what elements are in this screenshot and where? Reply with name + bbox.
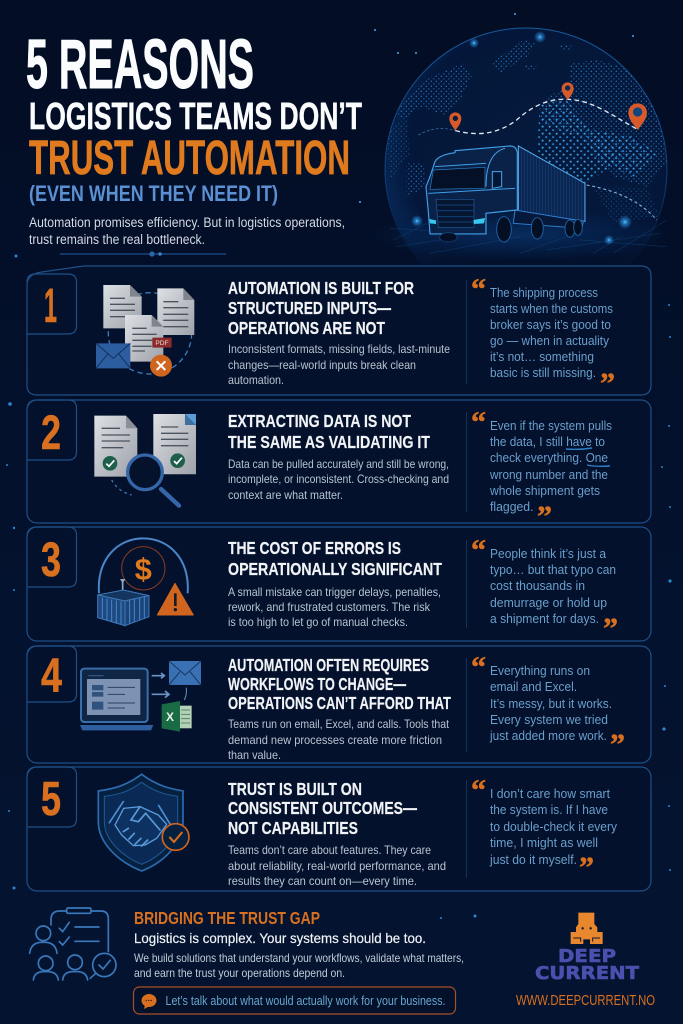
body text: about reliability, real-world performance, and — [228, 859, 446, 873]
quote: just do it myself. — [489, 853, 577, 867]
body text: incomplete, or inconsistent. Cross-checking and — [228, 472, 449, 486]
icon: shield with handshake — [98, 774, 189, 871]
quote: cost thousands in — [490, 579, 585, 593]
quote: wrong number and the — [489, 468, 608, 482]
body text — [228, 342, 450, 387]
number 3: 3 — [41, 534, 61, 587]
body text: and earn the trust your operations depend on. — [134, 966, 345, 980]
wordmark — [535, 946, 640, 984]
heading: OPERATIONALLY SIGNIFICANT — [228, 559, 442, 579]
heading: THE COST OF ERRORS IS — [228, 538, 401, 558]
icon: octopus — [571, 913, 603, 944]
quote: “ — [471, 406, 486, 439]
quote: go — when in actuality — [490, 334, 610, 348]
quote — [471, 534, 618, 645]
quote: flagged. — [490, 500, 534, 514]
quote: demurrage or hold up — [490, 596, 607, 610]
body text: We build solutions that understand your workflows, validate what matters, — [134, 951, 464, 965]
wordmark: CURRENT — [535, 963, 640, 984]
quote: typo… but that typo can — [490, 563, 616, 577]
heading — [228, 538, 442, 579]
intro text — [29, 215, 345, 247]
quote: basic is still missing. — [490, 366, 596, 380]
body text: changes—real-world inputs break clean — [228, 358, 416, 372]
quote — [471, 273, 615, 400]
quote: “ — [471, 651, 486, 684]
body text: results they can count on—every time. — [228, 874, 417, 888]
quote: ” — [537, 500, 552, 533]
panel: reason 1: 1 — [44, 280, 57, 333]
quote: it’s not… something — [490, 350, 594, 364]
body text: Teams don’t care about features. They care — [228, 843, 431, 857]
quote — [471, 774, 618, 884]
heading: NOT CAPABILITIES — [228, 818, 358, 838]
quote: “ — [471, 534, 486, 567]
quote: the data, I still have to — [490, 435, 605, 449]
title — [26, 25, 362, 185]
body text: Teams run on email, Excel, and calls. Tools that — [228, 717, 450, 731]
quote: whole shipment gets — [489, 484, 600, 498]
heading: CONSISTENT OUTCOMES— — [228, 798, 417, 818]
quote: Every system we tried — [490, 713, 608, 727]
quote: ” — [600, 367, 615, 400]
body text — [228, 717, 450, 762]
header divider — [60, 251, 226, 257]
body text: context are what matter. — [228, 488, 343, 502]
icon: container and cost warning: $ — [135, 552, 152, 586]
heading: OPERATIONS ARE NOT — [228, 318, 385, 338]
body text: A small mistake can trigger delays, penalties, — [228, 585, 441, 599]
heading: BRIDGING THE TRUST GAP — [134, 908, 320, 928]
icon: scattered documents — [96, 285, 194, 377]
hero illustration: globe and truck — [359, 13, 668, 262]
icon: container and cost warning — [98, 538, 193, 626]
body text: demand new processes create more friction — [228, 733, 442, 747]
quote: the system is. If I have — [490, 803, 608, 817]
heading: AUTOMATION IS BUILT FOR — [228, 278, 414, 298]
heading — [228, 779, 417, 838]
body text: automation. — [228, 373, 284, 387]
heading: STRUCTURED INPUTS— — [228, 298, 391, 318]
intro text: trust remains the real bottleneck. — [29, 232, 205, 247]
intro text: Automation promises efficiency. But in logistics operations, — [29, 215, 345, 230]
icon: team with checklist — [30, 908, 116, 980]
number 5: 5 — [41, 773, 61, 826]
route — [418, 99, 657, 220]
heading — [228, 278, 414, 338]
quote: just added more work. — [489, 729, 607, 743]
number 4: 4 — [41, 650, 62, 703]
panel: bridging the trust gap — [30, 908, 464, 1014]
quote: ” — [579, 851, 594, 884]
quote: broker says it’s good to — [490, 318, 611, 332]
body text: Inconsistent formats, missing fields, last-minute — [228, 342, 450, 356]
icon: location pins — [449, 82, 647, 131]
quote: The shipping process — [490, 286, 598, 300]
panel: reason 2 — [27, 400, 651, 533]
logo: Deep Current — [535, 913, 640, 984]
quote: People think it’s just a — [490, 547, 606, 561]
panel: reason 4 — [27, 646, 651, 763]
call to action button — [134, 987, 456, 1014]
body text: rework, and frustrated customers. The risk — [228, 600, 431, 614]
call to action button: Let’s talk about what would actually work for your business. — [166, 994, 446, 1008]
subtitle: (EVEN WHEN THEY NEED IT) — [29, 181, 278, 206]
icon: chat bubble — [142, 994, 156, 1009]
title: TRUST AUTOMATION — [29, 132, 350, 185]
body text: than value. — [228, 748, 281, 762]
body text — [228, 843, 446, 888]
quote: I don’t care how smart — [490, 787, 610, 801]
quote: to double-check it every — [490, 820, 618, 834]
panel: reason 1 — [27, 266, 651, 400]
quote: It’s messy, but it works. — [490, 697, 612, 711]
quote: check everything. One — [490, 451, 608, 465]
number 2: 2 — [41, 407, 61, 460]
quote: ” — [610, 728, 625, 761]
quote: time, I might as well — [490, 836, 598, 850]
floor glow — [370, 209, 670, 261]
panel: reason 3 — [27, 527, 651, 645]
body text — [134, 951, 464, 980]
icon: scattered documents: PDF — [155, 340, 169, 347]
body text: is too high to let go of manual checks. — [228, 615, 408, 629]
truck — [426, 146, 585, 242]
title: 5 REASONS — [26, 25, 254, 103]
quote: a shipment for days. — [490, 612, 599, 626]
heading: TRUST IS BUILT ON — [228, 779, 362, 799]
quote: ” — [603, 612, 618, 645]
heading: AUTOMATION OFTEN REQUIRES — [228, 655, 429, 675]
quote: Even if the system pulls — [490, 419, 612, 433]
heading: EXTRACTING DATA IS NOT — [228, 411, 411, 431]
glow spots — [359, 13, 634, 245]
heading — [228, 655, 451, 713]
quote — [471, 406, 612, 533]
heading — [228, 411, 430, 452]
background stars — [6, 254, 672, 919]
quote: starts when the customs — [490, 302, 613, 316]
icon: documents and magnifier — [94, 414, 196, 506]
heading: OPERATIONS CAN’T AFFORD THAT — [228, 693, 451, 713]
subheading: Logistics is complex. Your systems should be too. — [134, 930, 426, 946]
quote — [471, 651, 625, 761]
quote: email and Excel. — [490, 680, 577, 694]
quote: Everything runs on — [490, 664, 590, 678]
panel: reason 5 — [27, 767, 651, 891]
heading: WORKFLOWS TO CHANGE— — [228, 674, 406, 694]
wordmark: DEEP — [558, 946, 616, 967]
body text — [228, 457, 449, 502]
icon: laptop, email and spreadsheet: X — [166, 710, 174, 724]
quote: “ — [471, 273, 486, 306]
body text: Data can be pulled accurately and still be wrong, — [228, 457, 449, 471]
quote: “ — [471, 774, 486, 807]
heading: THE SAME AS VALIDATING IT — [228, 432, 430, 452]
floor grid — [390, 220, 667, 253]
body text — [228, 585, 441, 629]
title: LOGISTICS TEAMS DON’T — [29, 96, 362, 138]
globe — [384, 28, 668, 262]
icon: laptop, email and spreadsheet — [80, 661, 201, 732]
